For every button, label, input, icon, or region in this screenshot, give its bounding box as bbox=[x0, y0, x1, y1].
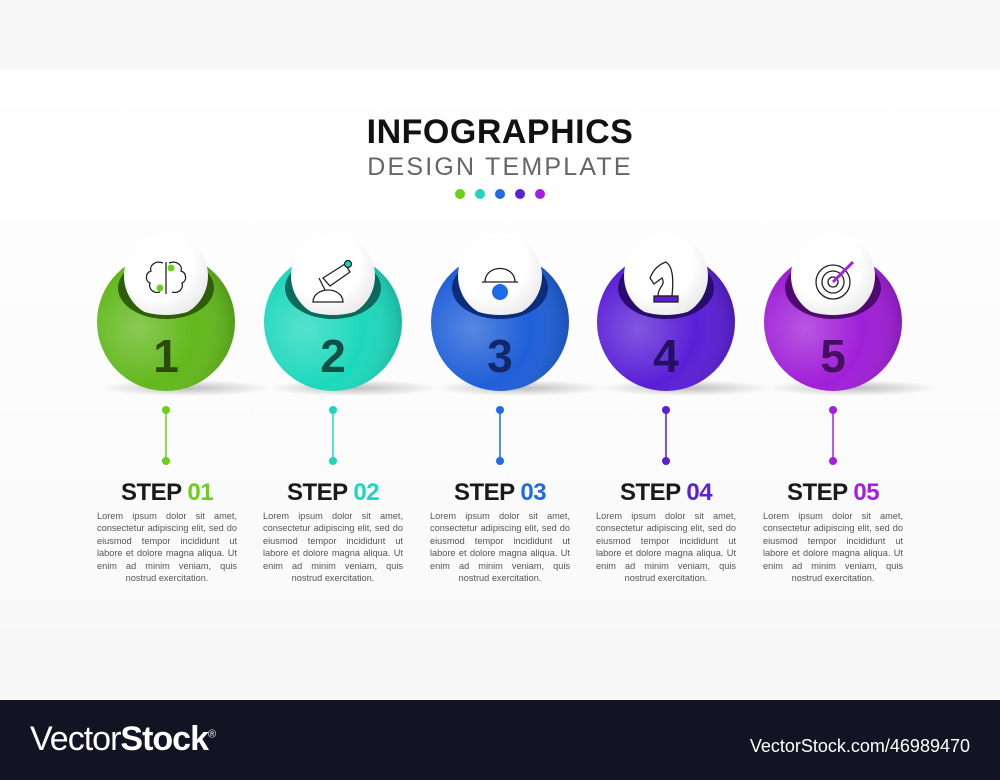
title: DESIGN TEMPLATE bbox=[367, 153, 633, 181]
sphere 3 bbox=[431, 257, 594, 465]
spheres and connectors bbox=[97, 189, 926, 465]
step 1 text bbox=[97, 479, 237, 583]
sphere 2 bbox=[264, 257, 426, 465]
title: INFOGRAPHICS bbox=[367, 113, 633, 151]
icon: microscope bbox=[313, 260, 352, 302]
sphere 2: 2 bbox=[320, 330, 346, 382]
icon: chess knight bbox=[650, 262, 678, 302]
sphere 5: 5 bbox=[820, 330, 846, 382]
footer bar: VectorStock® bbox=[30, 720, 215, 758]
step 1 text: Lorem ipsum dolor sit amet, consectetur adipiscing elit, sed do eiusmod tempor incididunt ut labore et dolore magna aliqua. Ut enim ad minim veniam, quis nostrud exercitation. bbox=[97, 511, 237, 583]
step 3 text: Lorem ipsum dolor sit amet, consectetur adipiscing elit, sed do eiusmod tempor incididunt ut labore et dolore magna aliqua. Ut enim ad minim veniam, quis nostrud exercitation. bbox=[430, 511, 570, 583]
icon: brain bbox=[146, 262, 186, 294]
step 4 text: Lorem ipsum dolor sit amet, consectetur adipiscing elit, sed do eiusmod tempor incididunt ut labore et dolore magna aliqua. Ut enim ad minim veniam, quis nostrud exercitation. bbox=[596, 511, 736, 583]
step 3 text: STEP 03 bbox=[454, 479, 546, 506]
footer bar: VectorStock.com/46989470 bbox=[750, 736, 970, 756]
sphere 5 bbox=[764, 257, 926, 465]
icon: target bbox=[816, 262, 853, 299]
sphere 4 bbox=[597, 257, 760, 465]
step 2 text: Lorem ipsum dolor sit amet, consectetur adipiscing elit, sed do eiusmod tempor incididunt ut labore et dolore magna aliqua. Ut enim ad minim veniam, quis nostrud exercitation. bbox=[263, 511, 403, 583]
step 2 text: STEP 02 bbox=[287, 479, 379, 506]
step 3 text bbox=[430, 479, 570, 583]
step 5 text: STEP 05 bbox=[787, 479, 879, 506]
title dots bbox=[455, 189, 545, 199]
step 5 text bbox=[763, 479, 903, 583]
step 4 text: STEP 04 bbox=[620, 479, 712, 506]
step 4 text bbox=[596, 479, 736, 583]
sphere 1 bbox=[97, 257, 260, 465]
sphere 3: 3 bbox=[487, 330, 513, 382]
title bbox=[367, 113, 633, 181]
step 1 text: STEP 01 bbox=[121, 479, 213, 506]
step 2 text bbox=[263, 479, 403, 583]
step 5 text: Lorem ipsum dolor sit amet, consectetur adipiscing elit, sed do eiusmod tempor incididunt ut labore et dolore magna aliqua. Ut enim ad minim veniam, quis nostrud exercitation. bbox=[763, 511, 903, 583]
sphere 1: 1 bbox=[153, 330, 179, 382]
footer bar bbox=[0, 700, 1000, 780]
icon: helmet gear bbox=[482, 268, 518, 300]
sphere 4: 4 bbox=[653, 330, 679, 382]
